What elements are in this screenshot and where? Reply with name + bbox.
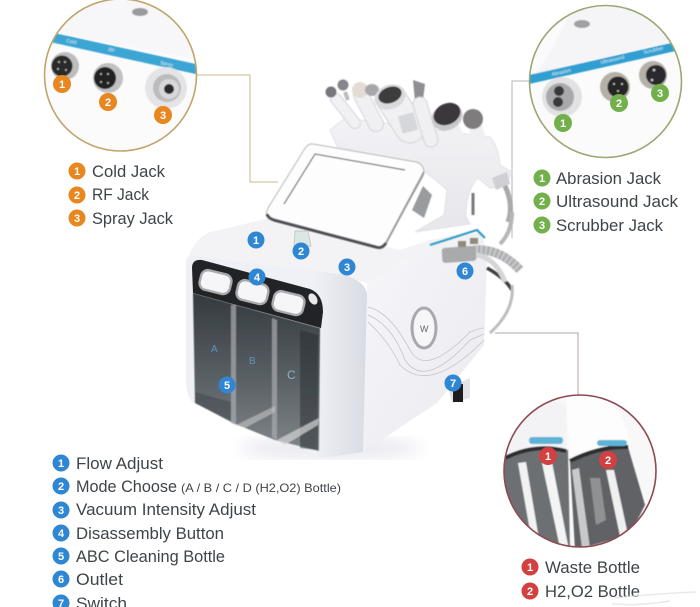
- connector line: right callout: [512, 81, 529, 238]
- legend: machine parts: 5: [58, 551, 64, 563]
- jack: spray: [145, 67, 187, 109]
- decorative side waves: [368, 307, 484, 376]
- badges on machine: [218, 232, 474, 394]
- legend: bottles: H2,O2 Bottle: [545, 582, 640, 601]
- badge: orange 1: 1: [59, 79, 65, 91]
- jack: ultrasound: [600, 72, 630, 102]
- badge: green 3: 3: [657, 88, 663, 100]
- handpiece: round head: [427, 98, 467, 138]
- legend: machine parts: ABC Cleaning Bottle: [76, 547, 225, 566]
- badge: 2: [292, 242, 310, 260]
- bottle label tags: [529, 437, 563, 444]
- legend: green jacks: Ultrasound Jack: [556, 192, 678, 211]
- badge: 6: 6: [462, 266, 468, 278]
- blue label band: [530, 42, 674, 84]
- badge: 6: [456, 262, 474, 280]
- badge: 7: [444, 374, 462, 392]
- badge: orange 2: 2: [105, 97, 111, 109]
- dark button band: [192, 260, 323, 328]
- badge: red 2: [599, 451, 617, 469]
- jack: scrubber: [639, 61, 667, 89]
- jack: RF: [93, 63, 123, 93]
- badge: 1: 1: [253, 235, 259, 247]
- legend: orange jacks: [68, 162, 173, 228]
- connector line: bottom callout: [495, 333, 578, 395]
- badge: 3: [338, 258, 356, 276]
- legend: green jacks: Scrubber Jack: [556, 216, 663, 235]
- legend: machine parts: Mode Choose: [76, 477, 177, 496]
- legend: green jacks: 1: [539, 173, 545, 185]
- waste bottle: [504, 449, 571, 546]
- badge: 2: 2: [298, 246, 304, 258]
- handpiece: tube 1: [326, 86, 355, 123]
- legend: bottles: 1: [527, 562, 533, 574]
- bottle lettering: B: [249, 356, 256, 367]
- badge: orange 2: [99, 93, 117, 111]
- legend: orange jacks: 2: [74, 190, 80, 202]
- switch: [448, 378, 470, 403]
- legend: orange jacks: Spray Jack: [92, 209, 173, 228]
- legend: machine parts: Vacuum Intensity Adjust: [76, 500, 256, 519]
- handpiece: tube 2: [338, 80, 348, 100]
- machine front frame: [186, 256, 367, 458]
- legend: machine parts: 1: [58, 458, 64, 470]
- badge: 5: [218, 376, 236, 394]
- badge: green 2: [610, 94, 628, 112]
- badge: red 2: 2: [605, 455, 611, 467]
- legend: machine parts: Flow Adjust: [76, 454, 163, 473]
- legend: machine parts: [52, 454, 341, 607]
- panel: right detail circle: [525, 5, 682, 158]
- badge: 1: [248, 232, 264, 248]
- panel: left detail circle: Cold: [66, 38, 77, 46]
- legend: green jacks: 2: [539, 196, 545, 208]
- legend: green jacks: 3: [539, 220, 545, 232]
- machine top face: [187, 218, 467, 283]
- panel: left detail circle: Spray: [160, 60, 174, 69]
- machine side face: [363, 232, 487, 452]
- bottle lettering: [211, 344, 296, 382]
- handpiece: multipolar: [463, 109, 483, 146]
- badge: 5: 5: [224, 380, 230, 392]
- watermark: [612, 592, 696, 605]
- connector line: left callout: [197, 75, 278, 182]
- legend: orange jacks: Cold Jack: [92, 162, 165, 181]
- badge: red 1: 1: [545, 451, 551, 463]
- bottle lettering: C: [287, 368, 296, 382]
- panel: right detail circle: Ultrasound: [600, 55, 625, 66]
- legend: orange jacks: 1: [74, 166, 80, 178]
- panel: left detail circle: RF: [108, 47, 115, 54]
- badge: 3: 3: [344, 262, 350, 274]
- badge: 4: [248, 268, 266, 286]
- badge: orange 3: [154, 106, 172, 124]
- badge: green 1: 1: [560, 118, 566, 130]
- panel: right detail circle: Abrasion: [551, 68, 572, 78]
- machine illustration: [186, 80, 520, 458]
- legend: green jacks: [534, 169, 678, 235]
- legend: orange jacks: 3: [74, 213, 80, 225]
- touch screen: [267, 144, 424, 248]
- badge: green 3: [651, 84, 669, 102]
- badge: red 1: [539, 447, 557, 465]
- badge: green 1: [554, 114, 572, 132]
- badge: 7: 7: [450, 378, 456, 390]
- legend: bottles: [522, 558, 640, 601]
- handpiece: scrubber: [413, 80, 431, 140]
- handpiece: ultrasound head: [371, 80, 418, 134]
- jack: cold: [51, 52, 79, 80]
- legend: machine parts: 6: [58, 574, 64, 586]
- badge: green 2: 2: [616, 98, 622, 110]
- legend: bottles: Waste Bottle: [545, 558, 640, 577]
- badge: 4: 4: [254, 272, 261, 284]
- H2,O2 bottle: [570, 447, 645, 550]
- legend: machine parts: (A / B / C / D (H2,O2) Bottle): [181, 481, 341, 495]
- legend: green jacks: Abrasion Jack: [556, 169, 661, 188]
- legend: machine parts: 3: [58, 505, 64, 517]
- disassembly buttons: [198, 269, 306, 317]
- panel: left detail circle: [44, 0, 200, 151]
- probe cradle and neck: [326, 80, 512, 232]
- bottle caps: [506, 436, 566, 456]
- legend: bottles: 2: [527, 586, 533, 598]
- legend: orange jacks: RF Jack: [92, 185, 149, 204]
- bottle lettering: A: [211, 344, 218, 355]
- outlet fittings and hoses: [430, 212, 520, 333]
- bottles: [193, 293, 320, 451]
- legend: machine parts: Disassembly Button: [76, 524, 224, 543]
- badge: orange 3: 3: [160, 110, 166, 122]
- panel: right detail circle: Scrubber: [643, 45, 665, 56]
- blue label band: [50, 32, 200, 75]
- handpiece: nozzle: [352, 82, 379, 124]
- panel: bottom detail circle: [500, 395, 656, 550]
- legend: machine parts: 4: [58, 528, 65, 540]
- logo medallion: [412, 308, 436, 348]
- legend: machine parts: 2: [58, 481, 64, 493]
- legend: machine parts: Outlet: [76, 570, 123, 589]
- jack: abrasion: [542, 77, 582, 117]
- logo medallion: W: [420, 324, 429, 334]
- badge: orange 1: [53, 75, 71, 93]
- mode knob: [294, 231, 311, 246]
